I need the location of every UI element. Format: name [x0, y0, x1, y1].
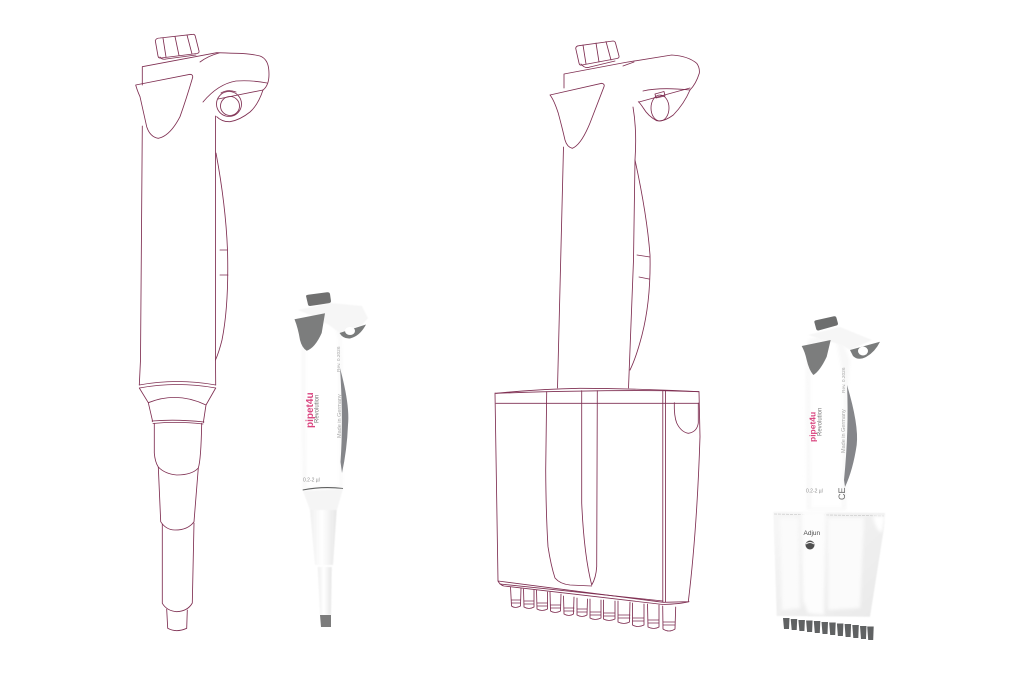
handle head [808, 327, 872, 350]
block body [773, 512, 885, 617]
grey back grip [340, 368, 348, 473]
handle head [298, 303, 368, 333]
line drawing: multichannel pipette [495, 41, 700, 631]
handle body [558, 107, 636, 388]
brand text: 0.2-2 µl [806, 488, 823, 494]
icon: grey finger hook [850, 342, 880, 359]
brand text: Revolution [314, 395, 320, 423]
brand text: 0.2-2 µl [303, 478, 320, 484]
icon: plunger trigger [550, 83, 604, 148]
back grip with ticks [630, 160, 650, 370]
handle body [139, 116, 216, 385]
brand text: pipet4u [305, 392, 316, 428]
line drawing: single-channel pipette [136, 34, 269, 631]
icon: plunger trigger [136, 74, 193, 138]
icon: finger ring [639, 88, 690, 121]
grey back grip [844, 385, 857, 487]
brand text: Revolution [818, 408, 824, 436]
collar ring [303, 488, 343, 490]
handle shading [806, 330, 850, 510]
icon: finger ring [216, 90, 263, 116]
brand text: pipet4u [808, 412, 818, 442]
brand text: Rev. 0.2026 [841, 367, 847, 393]
row of 12 nozzle tips [510, 587, 676, 631]
icon: grey knob [814, 316, 838, 331]
product photo: single-channel pipette [294, 292, 368, 627]
mount block outline [495, 388, 700, 602]
collar rings [139, 382, 216, 388]
thumb recess [674, 403, 698, 433]
brand text: Made in Germany [841, 409, 847, 453]
brand text [303, 346, 343, 484]
lower shaft [139, 388, 216, 423]
icon: grey tip [320, 615, 331, 627]
icon: adjustment knob outline [576, 41, 619, 68]
product photo: multichannel pipette [773, 316, 885, 640]
block base [498, 581, 689, 604]
seam line [774, 514, 884, 516]
front tab [802, 511, 826, 615]
lower shaft [303, 489, 343, 615]
brand text: CE [837, 487, 847, 500]
front tab [546, 392, 592, 586]
icon: grey finger hook [340, 324, 366, 339]
handle top and finger hook [564, 55, 699, 121]
back grip with ticks [216, 153, 228, 360]
thumb recess [873, 516, 885, 532]
row of dark tips [783, 618, 874, 640]
icon: round logo [806, 540, 814, 550]
brand label: Adjun [804, 530, 821, 537]
nozzle tip [167, 609, 187, 631]
icon: grey trigger [294, 313, 325, 351]
body shading [302, 312, 342, 490]
brand text: Rev. 0.2026 [336, 346, 342, 372]
brand text [806, 367, 847, 500]
icon: grey trigger [802, 340, 831, 375]
handle top and finger hook [142, 53, 269, 122]
brand text: Made in Germany [337, 394, 343, 438]
icon: grey knob [306, 292, 331, 306]
icon: adjustment knob outline [155, 34, 199, 59]
